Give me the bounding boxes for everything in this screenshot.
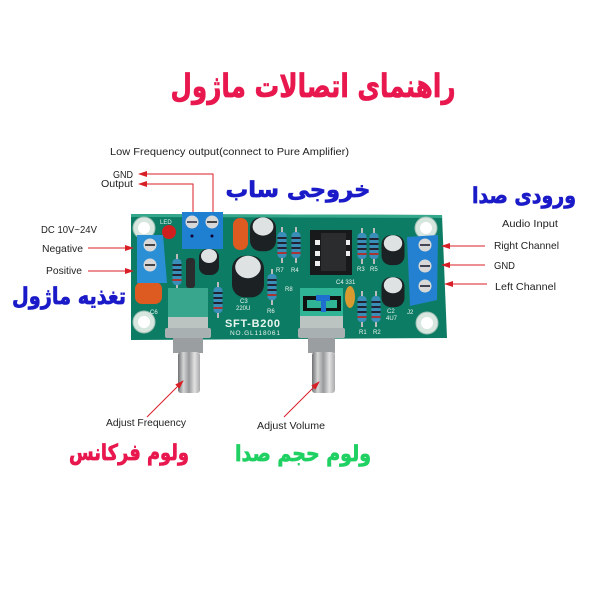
circuit board bbox=[131, 212, 447, 340]
power labels bbox=[41, 224, 97, 277]
board silkscreen: 4U7 bbox=[386, 316, 398, 322]
output labels bbox=[101, 169, 133, 190]
potentiometer: volume bbox=[298, 288, 345, 393]
terminal block: audio input bbox=[407, 235, 438, 306]
board silkscreen: R6 bbox=[267, 309, 275, 315]
board silkscreen: R2 bbox=[373, 330, 381, 336]
audio input labels bbox=[494, 218, 559, 293]
board silkscreen: R7 bbox=[276, 268, 284, 274]
audio input labels: Audio Input bbox=[502, 218, 558, 230]
LED: LED bbox=[160, 220, 172, 226]
board silkscreen bbox=[150, 267, 414, 337]
terminal block: output bbox=[182, 212, 223, 249]
audio input labels: Right Channel bbox=[494, 240, 559, 252]
board silkscreen: C4 331 bbox=[336, 280, 356, 286]
mounting holes bbox=[133, 217, 438, 334]
power labels: Positive bbox=[46, 265, 82, 277]
audio input labels: GND bbox=[494, 260, 515, 272]
power labels: DC 10V~24V bbox=[41, 224, 97, 236]
board silkscreen: C2 bbox=[387, 309, 395, 315]
board silkscreen: C3 bbox=[240, 299, 248, 305]
audio input labels: Left Channel bbox=[495, 281, 556, 293]
IC socket bbox=[310, 230, 352, 275]
board silkscreen: SFT-B200 bbox=[225, 318, 280, 330]
title: راهنمای اتصالات ماژول bbox=[170, 67, 456, 105]
LED bbox=[160, 220, 176, 239]
resistors bbox=[172, 254, 182, 290]
board silkscreen: NO.GL118061 bbox=[230, 330, 280, 337]
board silkscreen: R5 bbox=[370, 267, 378, 273]
tan capacitor C4 bbox=[345, 286, 355, 308]
heading: frequency knob: ولوم فرکانس bbox=[69, 441, 189, 466]
heading: audio input: ورودی صدا bbox=[472, 184, 576, 209]
label: adjust frequency: Adjust Frequency bbox=[106, 417, 187, 429]
heading: subwoofer output: خروجی ساب bbox=[226, 178, 370, 203]
orange capacitors bbox=[135, 218, 248, 304]
output labels: Output bbox=[101, 178, 133, 190]
top caption: low frequency output: Low Frequency output(connect to Pure Amplifier) bbox=[110, 146, 349, 158]
board silkscreen: R3 bbox=[357, 267, 365, 273]
arrows bbox=[88, 174, 487, 417]
potentiometer: frequency bbox=[165, 288, 211, 393]
diode bbox=[186, 258, 195, 288]
output labels: GND bbox=[113, 169, 133, 181]
heading: volume knob: ولوم حجم صدا bbox=[235, 442, 371, 467]
label: adjust volume: Adjust Volume bbox=[257, 420, 325, 432]
board silkscreen: 220U bbox=[236, 306, 250, 312]
terminal block: power bbox=[137, 235, 167, 283]
power labels: Negative bbox=[42, 243, 83, 255]
board silkscreen: J2 bbox=[407, 310, 414, 316]
electrolytic capacitors bbox=[199, 249, 219, 275]
board silkscreen: C6 bbox=[150, 310, 158, 316]
board silkscreen: R1 bbox=[359, 330, 367, 336]
heading: module power: تغذیه ماژول bbox=[12, 284, 126, 310]
board silkscreen: R8 bbox=[285, 287, 293, 293]
board silkscreen: R4 bbox=[291, 268, 299, 274]
